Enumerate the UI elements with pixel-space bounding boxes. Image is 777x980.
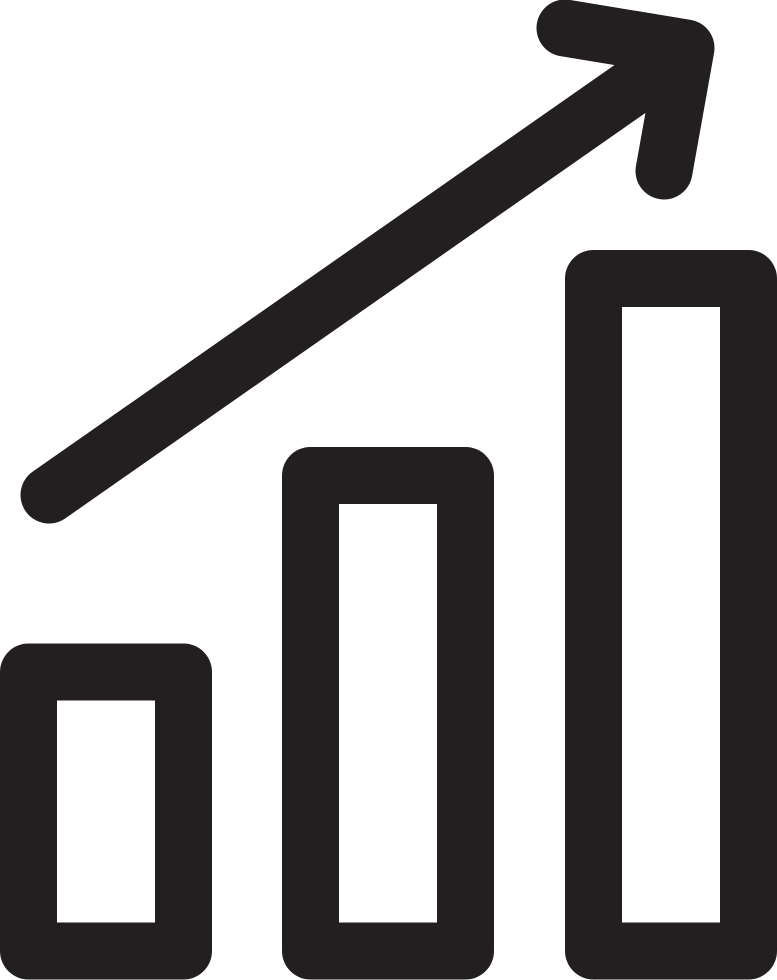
arrow: rising trend xyxy=(49,28,686,495)
bar: tall right xyxy=(594,278,748,951)
bar: medium centre xyxy=(310,476,466,951)
bar: short left xyxy=(28,672,184,951)
